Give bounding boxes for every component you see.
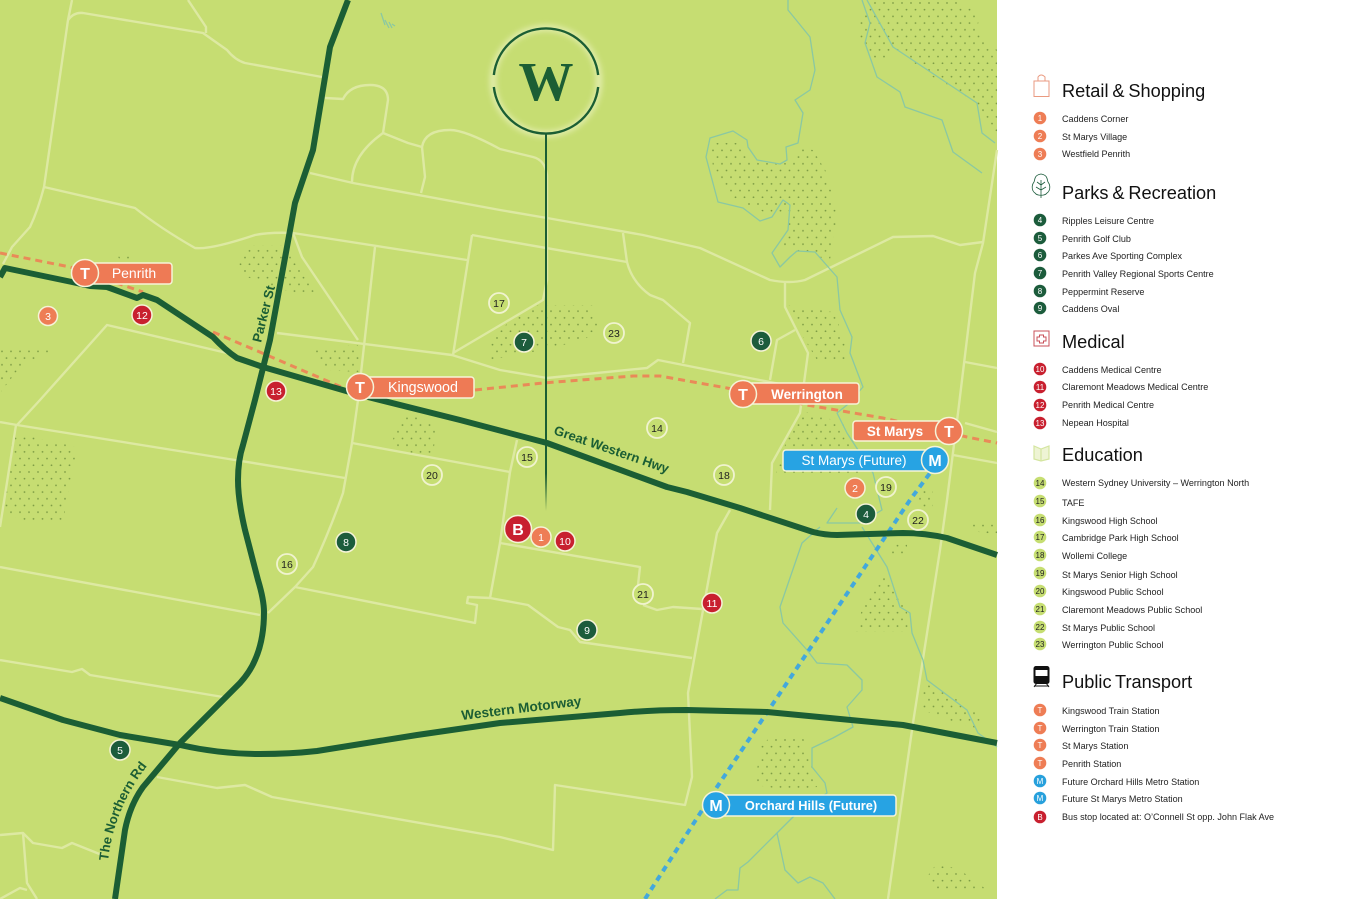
legend: public transport: Future St Marys Metro Station [1062, 794, 1183, 804]
map markers: parks: 9 [584, 625, 590, 637]
legend: retail and shopping: Caddens Corner [1062, 114, 1128, 124]
legend: education: TAFE [1062, 498, 1084, 508]
station label: St Marys (Future) [783, 446, 948, 474]
legend: parks and recreation: 7 [1038, 269, 1043, 278]
map markers: education: 21 [637, 589, 649, 601]
legend: education: 20 [1036, 587, 1045, 596]
map markers: retail: 2 [852, 483, 858, 495]
legend: public transport: T [1038, 741, 1043, 750]
station label: St Marys: T [944, 424, 954, 441]
map markers: retail [38, 306, 865, 547]
legend: medical: 11 [1036, 383, 1045, 392]
legend: parks and recreation [1032, 174, 1216, 314]
legend: parks and recreation: 6 [1038, 251, 1043, 260]
legend: medical: Nepean Hospital [1062, 418, 1129, 428]
station label: St Marys (Future): M [928, 453, 942, 470]
legend: public transport [1034, 666, 1274, 823]
map markers: education: 23 [608, 328, 620, 340]
icon: open book [1034, 446, 1049, 461]
legend: retail and shopping: St Marys Village [1062, 132, 1127, 142]
map markers: retail: 1 [538, 532, 544, 544]
legend: education: Western Sydney University – Werrington North [1062, 478, 1249, 488]
station label: Penrith [72, 260, 172, 286]
legend: medical: 10 [1036, 365, 1045, 374]
legend: retail and shopping: 3 [1038, 150, 1043, 159]
map markers: parks: 7 [521, 337, 527, 349]
legend: parks and recreation: Parks & Recreation [1062, 183, 1216, 203]
map markers: parks: 4 [863, 509, 869, 521]
legend: education: 23 [1036, 640, 1045, 649]
map markers: education [277, 293, 928, 604]
station label: Penrith: Penrith [112, 265, 156, 281]
legend: medical: Claremont Meadows Medical Centre [1062, 382, 1208, 392]
legend: education: 22 [1036, 623, 1045, 632]
legend: retail and shopping [1034, 75, 1205, 160]
station label: St Marys: St Marys [867, 424, 923, 439]
map marker: bus stop B [504, 516, 532, 542]
legend: public transport: Bus stop located at: O’Connell St opp. John Flak Ave [1062, 812, 1274, 822]
station label: Kingswood [346, 374, 474, 400]
station label: St Marys (Future): St Marys (Future) [801, 453, 907, 468]
map markers: parks: 6 [758, 336, 764, 348]
station label: St Marys [853, 418, 962, 444]
road label: Western Motorway: Western Motorway [461, 693, 583, 723]
map markers: education: 20 [426, 470, 438, 482]
legend: education: Wollemi College [1062, 551, 1127, 561]
legend: public transport: B [1037, 813, 1043, 822]
dotted vegetation areas [0, 0, 997, 892]
logo marker with pointer line: W [518, 51, 574, 112]
map markers: medical: 13 [270, 386, 282, 398]
legend: public transport: T [1038, 759, 1043, 768]
legend: parks and recreation: 4 [1038, 216, 1043, 225]
station label: Werrington: Werrington [771, 387, 843, 402]
map markers: medical: 12 [136, 310, 148, 322]
legend: retail and shopping: Westfield Penrith [1062, 149, 1130, 159]
station label: Kingswood: Kingswood [388, 380, 458, 396]
legend: parks and recreation: Penrith Golf Club [1062, 234, 1131, 244]
legend: parks and recreation: Parkes Ave Sporting Complex [1062, 251, 1182, 261]
legend: public transport: Werrington Train Station [1062, 724, 1159, 734]
map markers: education: 16 [281, 559, 293, 571]
legend: retail and shopping: 1 [1038, 114, 1043, 123]
station label: Orchard Hills (Future) [702, 792, 896, 818]
legend: education: St Marys Public School [1062, 623, 1155, 633]
legend: education: 16 [1036, 516, 1045, 525]
road: Western Motorway [0, 698, 997, 754]
creeks [381, 0, 997, 899]
legend: education: 19 [1036, 569, 1045, 578]
legend: education: 17 [1036, 533, 1045, 542]
road: Parker St / The Northern Rd [115, 0, 348, 899]
legend: public transport: Kingswood Train Station [1062, 706, 1160, 716]
map markers: retail: 3 [45, 311, 51, 323]
railway dashed line [0, 253, 997, 443]
legend: parks and recreation: 9 [1038, 304, 1043, 313]
legend: education: 21 [1036, 605, 1045, 614]
legend: public transport: St Marys Station [1062, 741, 1128, 751]
legend: public transport: T [1038, 724, 1043, 733]
map markers: education: 14 [651, 423, 663, 435]
legend: medical [1034, 331, 1208, 429]
map background [0, 0, 997, 899]
minor roads [0, 0, 997, 899]
road: Great Western Hwy [0, 268, 997, 555]
legend: medical: 12 [1036, 401, 1045, 410]
legend: parks and recreation: Penrith Valley Regional Sports Centre [1062, 269, 1214, 279]
road label: Parker St: Parker St [249, 283, 278, 344]
legend: medical: 13 [1036, 419, 1045, 428]
legend: parks and recreation: Peppermint Reserve [1062, 287, 1144, 297]
station label: Werrington [730, 380, 859, 408]
map markers: medical [132, 305, 722, 613]
legend: parks and recreation: 5 [1038, 234, 1043, 243]
legend: public transport: Penrith Station [1062, 759, 1121, 769]
legend: education: Cambridge Park High School [1062, 533, 1179, 543]
map markers: medical: 11 [707, 598, 718, 610]
station label: Orchard Hills (Future): M [709, 798, 723, 815]
map markers: parks: 5 [117, 745, 123, 757]
legend: education: Claremont Meadows Public School [1062, 605, 1202, 615]
map markers: education: 15 [521, 452, 533, 464]
legend: education: Kingswood Public School [1062, 587, 1164, 597]
legend: education: St Marys Senior High School [1062, 570, 1178, 580]
station label: Penrith: T [80, 266, 90, 283]
station label: Werrington: T [738, 387, 748, 404]
legend: education [1034, 445, 1249, 650]
station label: Kingswood: T [355, 380, 365, 397]
legend: retail and shopping: Retail & Shopping [1062, 81, 1205, 101]
map marker: bus stop B: B [512, 522, 524, 539]
legend: public transport: T [1038, 706, 1043, 715]
legend: public transport: M [1037, 794, 1044, 803]
legend: parks and recreation: Caddens Oval [1062, 304, 1119, 314]
map markers: education: 19 [880, 482, 892, 494]
icon: train [1034, 666, 1050, 687]
legend: medical: Penrith Medical Centre [1062, 400, 1154, 410]
map markers: parks: 8 [343, 537, 349, 549]
legend: education: Werrington Public School [1062, 640, 1163, 650]
legend: public transport: Future Orchard Hills Metro Station [1062, 777, 1199, 787]
legend: medical: Medical [1062, 332, 1125, 352]
icon: medical cross [1034, 331, 1049, 346]
road label: The Northern Rd: The Northern Rd [99, 760, 147, 860]
station label: Orchard Hills (Future): Orchard Hills (Future) [745, 798, 877, 813]
map markers: medical: 10 [559, 536, 571, 548]
legend: education: Education [1062, 445, 1143, 465]
legend: education: Kingswood High School [1062, 516, 1158, 526]
map markers: education: 17 [493, 298, 505, 310]
map markers: education: 22 [912, 515, 924, 527]
icon: leaf [1032, 174, 1050, 198]
legend: parks and recreation: 8 [1038, 287, 1043, 296]
road label: Great Western Hwy: Great Western Hwy [552, 423, 672, 476]
legend: education: 18 [1036, 551, 1045, 560]
legend: education: 14 [1036, 479, 1045, 488]
legend panel [1032, 75, 1274, 823]
map markers: education: 18 [718, 470, 730, 482]
legend: education: 15 [1036, 497, 1045, 506]
legend: medical: Caddens Medical Centre [1062, 365, 1162, 375]
legend: retail and shopping: 2 [1038, 132, 1043, 141]
logo marker with pointer line [493, 28, 599, 511]
legend: public transport: Public Transport [1062, 672, 1192, 692]
legend: public transport: M [1037, 777, 1044, 786]
metro dashed line [645, 465, 936, 899]
map markers: parks [110, 331, 876, 760]
legend: parks and recreation: Ripples Leisure Centre [1062, 216, 1154, 226]
icon: shopping bag [1034, 75, 1049, 96]
